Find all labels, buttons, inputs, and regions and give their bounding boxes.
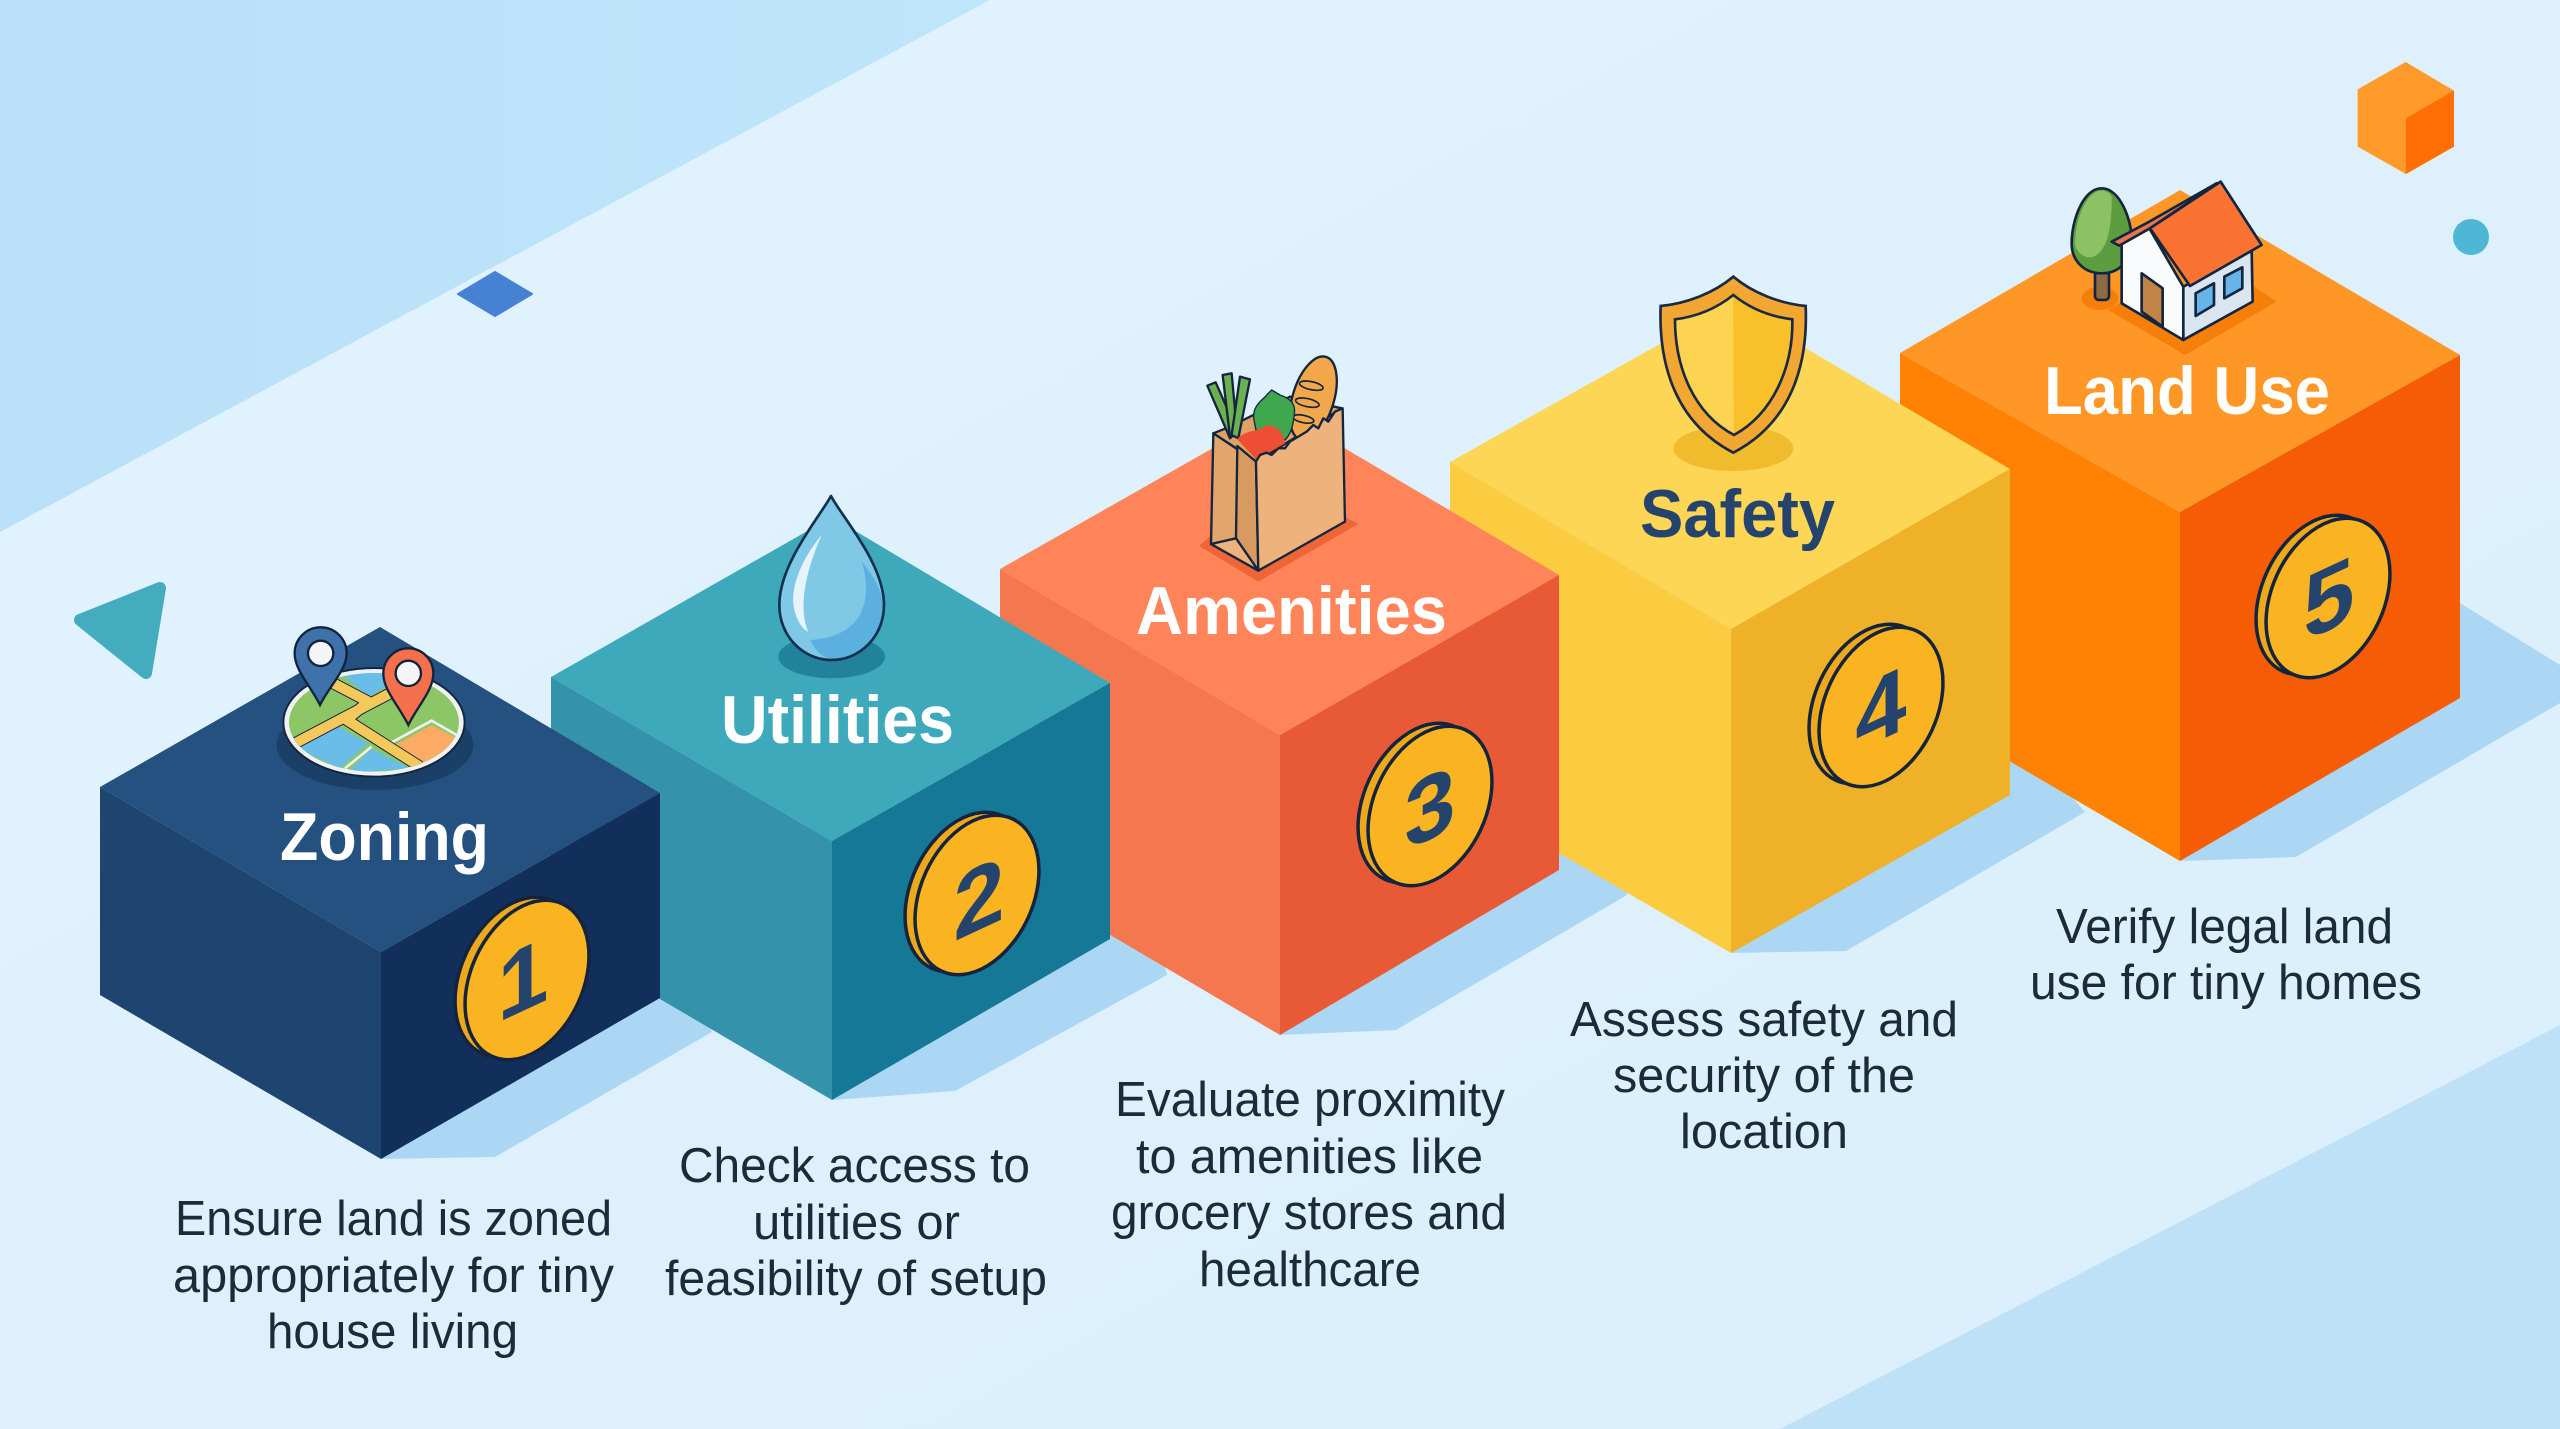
number coin 1: 1 (497, 915, 549, 1043)
step 1: zoning cube (100, 627, 660, 1159)
number coin 5 (2232, 495, 2414, 698)
icon: grocery bag (1199, 351, 1358, 582)
title: safety: Safety (1640, 476, 1835, 552)
number coin 4: 4 (1855, 644, 1907, 772)
description: utilities: feasibility of setup (665, 1252, 1047, 1306)
number coin 3: 3 (1404, 743, 1456, 871)
description: safety: Assess safety and (1570, 993, 1958, 1047)
number coin 1 (431, 877, 613, 1080)
title: amenities: Amenities (1136, 573, 1447, 649)
description: amenities: to amenities like (1136, 1130, 1483, 1184)
description: amenities: healthcare (1199, 1243, 1421, 1297)
description: utilities: utilities or (753, 1196, 960, 1250)
description: safety (1570, 993, 1958, 1159)
description: zoning (173, 1192, 614, 1359)
step 2: utilities cube (551, 496, 1110, 1100)
description: utilities (665, 1139, 1047, 1306)
description: utilities: Check access to (679, 1139, 1030, 1193)
decoration: blue diamond (458, 272, 532, 316)
step 5: land use cube (1900, 182, 2460, 861)
step 3: amenities cube (1000, 351, 1559, 1035)
description: amenities: grocery stores and (1111, 1186, 1507, 1240)
description: land use: use for tiny homes (2030, 956, 2422, 1010)
number coin 2 (881, 792, 1063, 995)
number coin 2: 2 (953, 834, 1005, 962)
number coin 5: 5 (2303, 534, 2355, 662)
cube shadows (381, 560, 2560, 1159)
description: amenities (1111, 1073, 1507, 1297)
decoration: orange cube (2358, 62, 2454, 174)
description: safety: security of the (1613, 1049, 1915, 1103)
title: zoning: Zoning (280, 799, 489, 875)
icon: shield (1660, 277, 1806, 471)
decoration: teal dot (2453, 219, 2489, 255)
description: land use (2030, 900, 2422, 1010)
step 4: safety cube (1450, 277, 2010, 953)
description: amenities: Evaluate proximity (1115, 1073, 1505, 1127)
icon: house and tree (2072, 182, 2277, 355)
description: zoning: Ensure land is zoned (175, 1192, 612, 1246)
decoration: teal triangle (80, 588, 160, 673)
description: land use: Verify legal land (2056, 900, 2393, 954)
number coin 4 (1785, 604, 1967, 807)
description: safety: location (1680, 1105, 1848, 1159)
icon: water drop (778, 496, 885, 678)
title: land use: Land Use (2044, 353, 2330, 429)
title: utilities: Utilities (721, 682, 954, 758)
icon: map with pins (277, 627, 473, 790)
description: zoning: appropriately for tiny (173, 1249, 614, 1303)
number coin 3 (1334, 703, 1516, 906)
description: zoning: house living (267, 1305, 518, 1359)
